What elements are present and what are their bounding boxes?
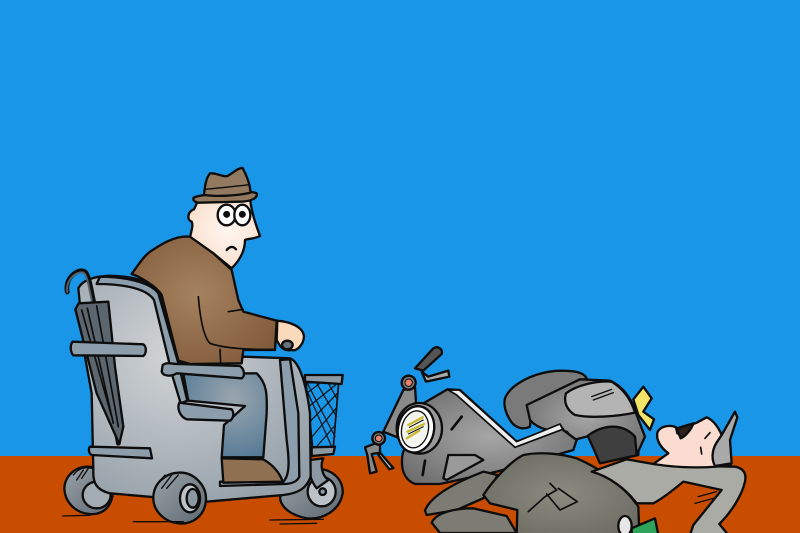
ground [0,456,800,533]
shoe upper [425,472,497,515]
trouser patch [528,483,577,512]
upper strap [71,342,146,356]
chrome frame rail [448,390,563,447]
fallen rider: eye marks [701,433,710,454]
handlebar and forks [365,347,449,473]
rider: shoe [222,458,283,483]
side panel [565,382,635,417]
front wheel [280,458,343,519]
rider: seat cushion [178,403,233,421]
shoe lower [432,508,517,533]
fallen rider: cap [713,412,737,466]
headlight [394,403,442,456]
foot peg [443,455,483,480]
footwell floor [220,359,299,486]
rider: thumb on tiller [282,341,293,349]
middle wheel [153,473,206,524]
rear wheel [587,422,638,463]
rider: hat [193,168,257,203]
fallen rider: head [653,417,731,467]
scooter body [78,276,311,502]
motorcycle and fallen rider [365,347,745,533]
rider: hand [277,321,304,350]
ground shadows [63,515,323,524]
panel marks [592,389,613,400]
frame slots [423,417,462,475]
wicker basket [305,375,343,456]
rider: armrest [162,363,244,378]
yellow ticket [633,387,654,430]
seat back trim [97,277,187,403]
rider: mouth [227,247,236,250]
lower strap [89,447,152,458]
frame [402,389,577,484]
ground lines [695,492,717,503]
spilled can [618,516,658,533]
mobility scooter and rider [63,168,343,524]
fallen rider: trousers [483,453,639,533]
rider: jacket [132,236,277,364]
rear wheel [64,467,113,514]
fallen rider: open mouth [677,423,693,438]
rear body [527,379,645,455]
rider: eyes [218,205,250,225]
rider: trousers [183,373,267,457]
rider: head [188,198,260,268]
seat [504,371,587,428]
rider: jacket sleeve lines [198,297,275,363]
umbrella [67,271,123,444]
fallen rider: shirt [592,459,745,533]
